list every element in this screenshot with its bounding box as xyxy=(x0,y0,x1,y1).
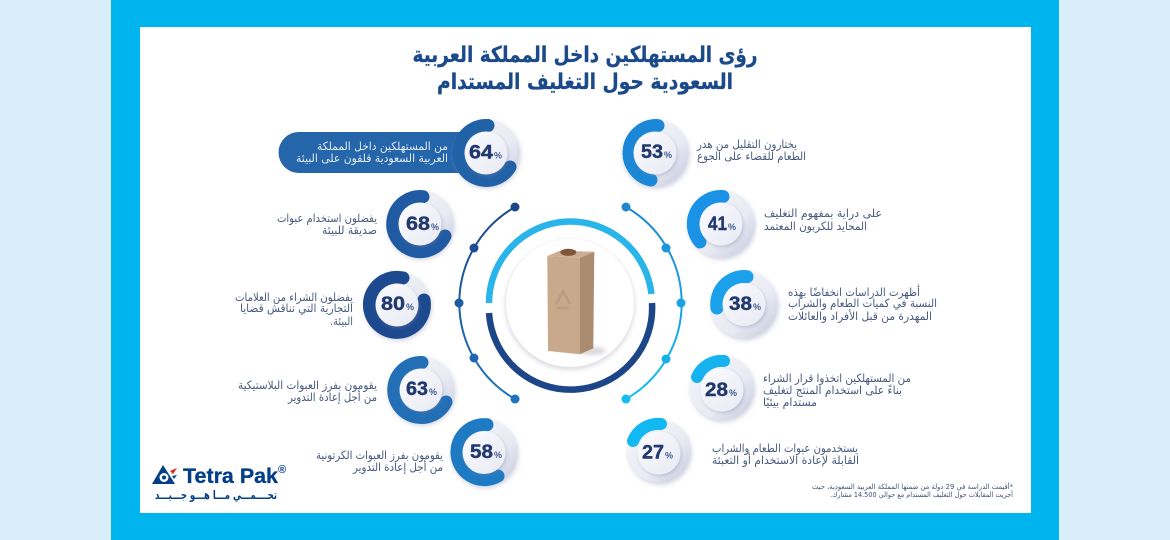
text 38 xyxy=(788,284,937,324)
donut 58: 58 xyxy=(470,442,493,463)
stat 28% xyxy=(690,356,911,420)
title xyxy=(412,43,758,95)
text 28: مستدام بيئيًا xyxy=(763,395,817,409)
donut 53 xyxy=(622,120,688,186)
text 38: المهدرة من قبل الأفراد والعائلات xyxy=(788,309,932,324)
title: رؤى المستهلكين داخل المملكة العربية xyxy=(412,43,758,68)
donut 64: % xyxy=(494,150,502,160)
donut 80 xyxy=(364,272,430,338)
icon: Tetra Pak triangle xyxy=(152,465,177,484)
registered mark: ® xyxy=(278,464,286,476)
text 80: البيئة. xyxy=(330,314,353,328)
text 58: من أجل إعادة التدوير xyxy=(352,459,443,475)
stat 41% xyxy=(688,190,882,258)
text 63: من أجل إعادة التدوير xyxy=(287,389,377,405)
donut 41: % xyxy=(728,222,736,232)
donut 58 xyxy=(450,419,518,486)
stat 38% xyxy=(710,271,937,338)
donut 27: % xyxy=(665,450,673,460)
recycle symbol xyxy=(556,291,570,308)
donut 38: % xyxy=(753,302,761,312)
text 38: النسبة في كميات الطعام والشراب xyxy=(788,296,937,311)
logo tagline: تحــــمـــي مـــا هـــو جـــيـــد xyxy=(155,488,277,503)
donut 41: 41 xyxy=(708,214,727,235)
stat 58% xyxy=(316,419,518,486)
text 53 xyxy=(696,137,806,164)
text 63: يقومون بفرز العبوات البلاستيكية xyxy=(238,378,377,393)
text 27: يستخدمون عبوات الطعام والشراب xyxy=(712,441,858,456)
title: السعودية حول التغليف المستدام xyxy=(437,70,733,95)
text 41 xyxy=(764,206,882,234)
stat 53% xyxy=(622,120,806,186)
white panel xyxy=(140,27,1031,513)
donut 68 xyxy=(386,190,454,258)
stat 80% xyxy=(235,272,430,338)
text 68: صديقة للبيئة xyxy=(322,223,377,237)
text 27: القابلة لإعادة الاستخدام أو التعبئة xyxy=(712,452,859,468)
text 28: من المستهلكين اتخذوا قرار الشراء xyxy=(763,371,911,386)
pill background xyxy=(278,132,488,173)
text 41: على دراية بمفهوم التغليف xyxy=(764,206,882,221)
text 68: يفضلون استخدام عبوات xyxy=(277,211,377,226)
text 58: يقومون بفرز العبوات الكرتونية xyxy=(316,448,443,463)
text 80 xyxy=(235,290,353,328)
pill text: العربية السعودية قلقون على البيئة xyxy=(296,151,448,166)
text 80: التجارية التي تناقش قضايا xyxy=(240,301,353,316)
donut 38: 38 xyxy=(729,294,752,315)
outer right arc with dots xyxy=(622,202,686,404)
logo: Tetra Pak xyxy=(152,464,286,503)
text 53: يختارون التقليل من هدر xyxy=(696,137,797,152)
footnote xyxy=(812,482,1013,499)
donut 27 xyxy=(628,420,690,482)
donut 28 xyxy=(690,356,754,420)
central graphic: carton with rings xyxy=(454,202,686,404)
footnote: أجريت المقابلات حول التغليف المستدام مع حوالي 14.500 مشارك. xyxy=(830,490,1013,499)
text 53: الطعام للقضاء على الجوع xyxy=(697,149,806,164)
logo wordmark: Tetra Pak xyxy=(183,465,278,488)
text 38: أظهرت الدراسات انخفاضًا بهذه xyxy=(788,284,920,300)
text 28 xyxy=(763,371,911,409)
donut 27: 27 xyxy=(642,442,664,464)
text 63 xyxy=(238,378,377,405)
text 27 xyxy=(712,441,859,468)
donut 80: 80 xyxy=(381,294,405,315)
inner bottom ring xyxy=(489,303,652,390)
text 58 xyxy=(316,448,443,475)
inner top ring xyxy=(489,222,652,303)
donut 38 xyxy=(710,271,778,338)
stat 64%: highlighted pill xyxy=(278,120,520,186)
outer left arc with dots xyxy=(454,202,520,404)
stat 63% xyxy=(238,356,454,424)
donut 80: % xyxy=(406,302,414,312)
donut 41 xyxy=(688,190,754,258)
donut 63: % xyxy=(429,387,437,397)
stat 68% xyxy=(277,190,454,258)
text 80: يفضلون الشراء من العلامات xyxy=(235,290,353,305)
central white disc xyxy=(506,239,634,367)
text 28: بناءً على استخدام المنتج لتغليف xyxy=(763,383,902,397)
pill text: من المستهلكين داخل المملكة xyxy=(317,139,448,154)
donut 68: 68 xyxy=(406,214,430,235)
footnote: *أقيمت الدراسة في 29 دولة من ضمنها المملكة العربية السعودية، حيث xyxy=(812,482,1013,491)
donut 63 xyxy=(388,356,454,424)
donut 28: 28 xyxy=(705,380,728,401)
donut 63: 63 xyxy=(406,379,428,400)
central disc shadow xyxy=(505,240,635,370)
donut 28: % xyxy=(729,388,737,398)
donut 58: % xyxy=(494,450,502,460)
donut 68: % xyxy=(431,222,439,232)
pill text xyxy=(296,139,448,166)
text 68 xyxy=(277,211,377,237)
donut 64 xyxy=(452,120,520,186)
carton shadow xyxy=(578,347,606,355)
donut 64: 64 xyxy=(469,142,493,164)
carton xyxy=(547,249,594,354)
donut 53: 53 xyxy=(641,142,663,163)
text 41: المحايد للكربون المعتمد xyxy=(764,219,867,234)
stat 27% xyxy=(628,420,859,482)
donut 53: % xyxy=(664,150,672,160)
